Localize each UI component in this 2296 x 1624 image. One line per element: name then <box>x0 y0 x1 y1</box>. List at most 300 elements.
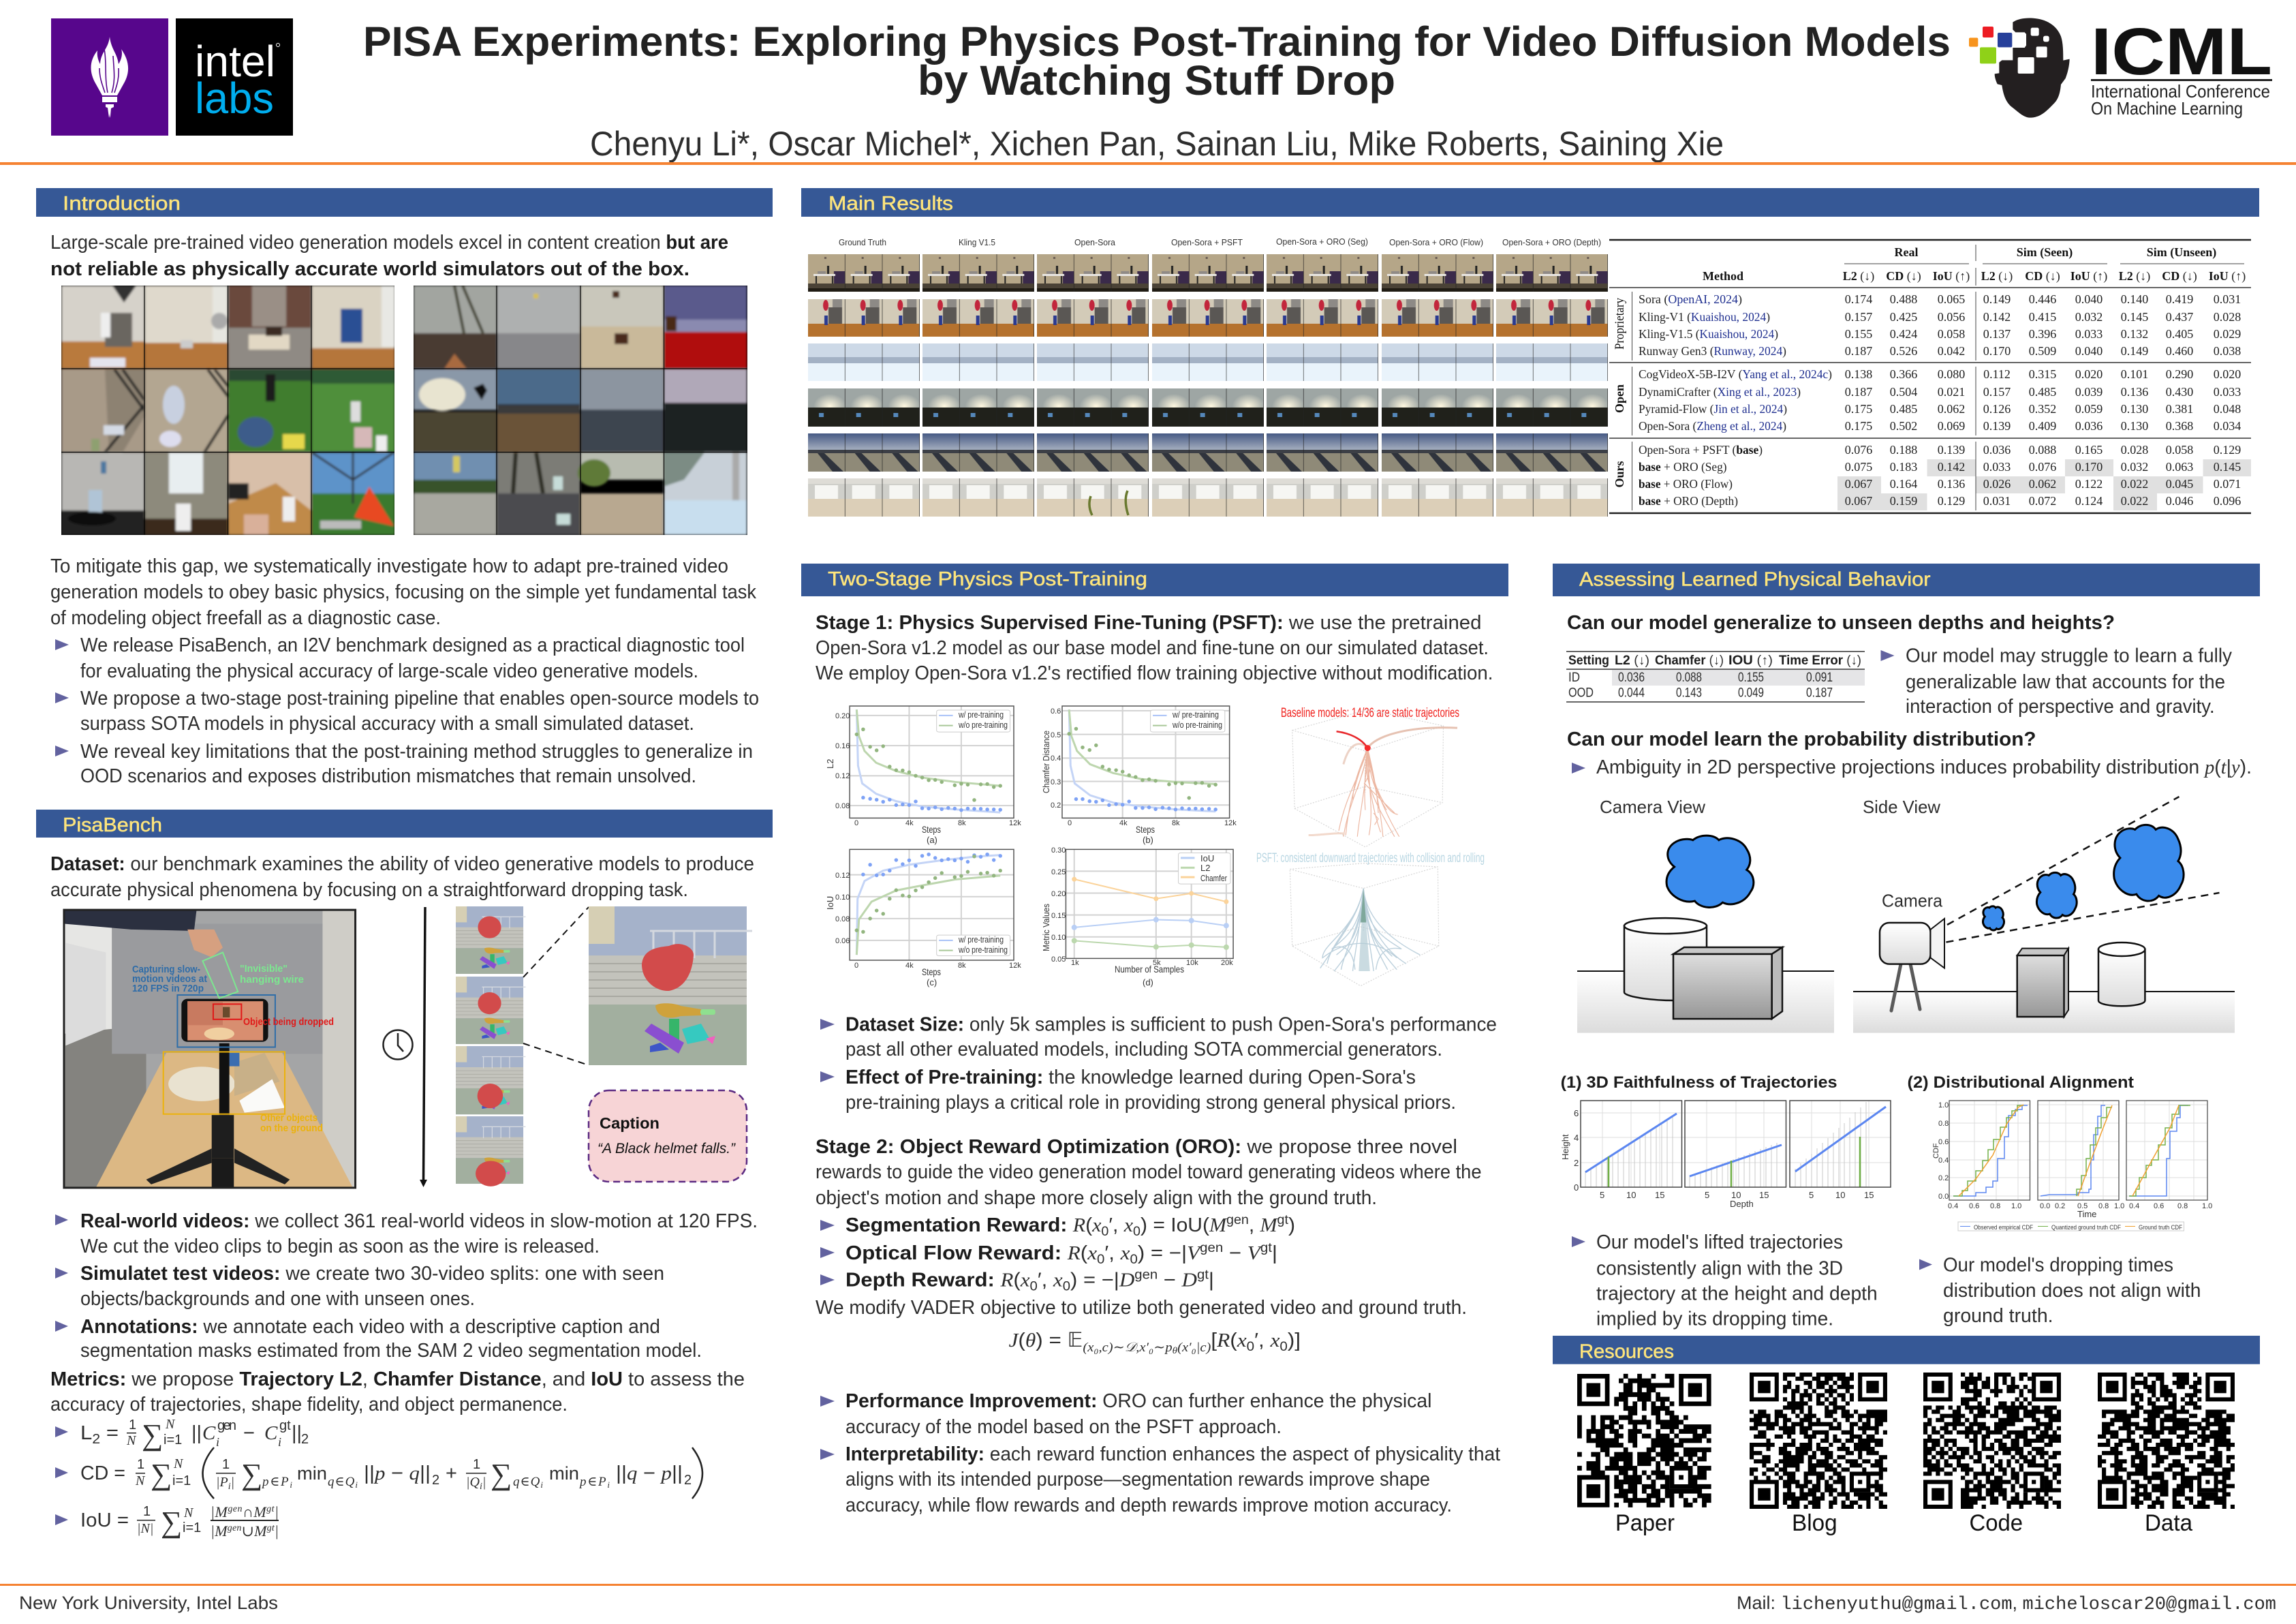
chart: dropping time CDF: Quantized ground truth CDF <box>2051 1224 2121 1231</box>
bullets: reward formulas <box>820 1213 1295 1293</box>
results table: 0.033 <box>2214 385 2241 399</box>
results table: 0.072 <box>2029 494 2056 508</box>
chart: IoU vs steps: w/ pre-training <box>958 934 1004 945</box>
results table: 0.026 <box>1983 477 2011 491</box>
illustration: side view: Camera <box>1882 891 1943 911</box>
bullets: stage 1 findings: Effect of Pre-training: the knowledge learned during Open-Sora's <box>846 1067 1416 1088</box>
formula: objective J: (x₀,c)∼𝒟,x′₀∼p <box>1083 1340 1173 1355</box>
chart: Chamfer vs steps: 0.6 <box>1051 707 1061 716</box>
table: ID vs OOD <box>1566 652 1865 702</box>
chart: metrics vs samples: Metric Values <box>1041 904 1051 951</box>
chart: L2 vs steps: 12k <box>1009 819 1021 827</box>
bullets: reward formulas: gen <box>1226 1213 1249 1227</box>
results table: 0.315 <box>2029 367 2056 381</box>
callout: caption: “A Black helmet falls.” <box>598 1141 736 1156</box>
chart: dropping time CDF: 0.4 <box>1938 1156 1949 1165</box>
results table: 0.130 <box>2121 419 2148 433</box>
formula: Chamfer Distance: i <box>540 1480 543 1490</box>
results table: Kling-V1.5 (Kuaishou, 2024) <box>1639 327 1778 341</box>
results table: 0.137 <box>1983 327 2011 341</box>
figure: PSFT trajectories <box>1256 851 1485 986</box>
bullets: stage 1 findings: past all other evaluated models, including SOTA commercial generators. <box>846 1039 1442 1060</box>
results table: 0.088 <box>2029 443 2056 457</box>
panel: Introduction <box>36 188 773 787</box>
chart: dropping time CDF: CDF <box>1932 1143 1940 1159</box>
QR code: Blog: Blog <box>1792 1510 1837 1536</box>
logo: ICML wordmark: International Conference <box>2091 81 2270 102</box>
formula: IoU: ∩ <box>243 1503 253 1520</box>
formula: objective J: (x′₀|c) <box>1177 1340 1211 1355</box>
chart: L2 vs steps: (a) <box>927 835 937 845</box>
text: stage 2: object's motion and shape more closely align with the ground truth. <box>816 1187 1377 1209</box>
results table: 0.022 <box>2121 494 2148 508</box>
results table: 0.059 <box>2075 402 2103 416</box>
photo: capture setup: motion videos at <box>132 973 207 985</box>
formula: IoU: gen <box>228 1504 242 1514</box>
results table: 0.062 <box>1938 402 1965 416</box>
panel: Resources <box>1553 1336 2260 1536</box>
chart: IoU vs steps: IoU <box>825 896 835 910</box>
bullet: dropping times finding <box>1919 1255 2201 1327</box>
heading: Main Results <box>801 188 2259 217</box>
chart: L2 vs steps: Steps <box>922 824 941 835</box>
results table: 0.075 <box>1845 460 1872 474</box>
bullets: stage 2 findings: accuracy, while flow rewards and depth rewards improve motion accuracy. <box>846 1495 1452 1516</box>
chart: dropping time CDF: 0.4 <box>1948 1202 1958 1210</box>
formula: IoU: gt <box>267 1523 275 1533</box>
chart: metrics vs samples: IoU <box>1200 853 1214 863</box>
formula: Chamfer Distance: i <box>355 1480 358 1490</box>
formula: objective J: θ <box>1173 1346 1177 1356</box>
photo: capture setup: hanging wire <box>240 974 304 985</box>
results table: 0.036 <box>2075 419 2103 433</box>
table: ID vs OOD: 0.044 <box>1618 686 1645 701</box>
logo: ICML wordmark: On Machine Learning <box>2091 98 2243 119</box>
formula: Chamfer Distance: | <box>482 1475 486 1490</box>
chart: dropping time CDF: 0.2 <box>2055 1202 2065 1210</box>
heading: Assessing: Assessing Learned Physical Behavior <box>1579 568 1931 590</box>
chart: metrics vs samples: 0.25 <box>1051 868 1066 876</box>
results table: 0.140 <box>2121 292 2148 306</box>
bullet: dropping times finding: Our model's dropping times <box>1943 1255 2173 1276</box>
results table: 0.046 <box>2166 494 2193 508</box>
formula: objective J: ′, <box>1254 1330 1270 1351</box>
results table: 0.032 <box>2075 310 2103 324</box>
column labels: Open-Sora + ORO (Seg) <box>1276 236 1368 247</box>
chart: metrics vs samples: 10k <box>1186 959 1198 967</box>
formula: objective J: 0 <box>1247 1340 1254 1354</box>
formula: objective J: )] <box>1288 1330 1301 1351</box>
formula: objective J: x <box>1269 1330 1280 1351</box>
formula: L2: C <box>264 1422 278 1444</box>
heading: Main Results: Main Results <box>828 193 953 215</box>
chart: metrics vs samples: L2 <box>1200 863 1210 873</box>
chart: trajectory height vs depth: 6 <box>1574 1108 1579 1118</box>
results table: 0.425 <box>1890 310 1917 324</box>
results table: 0.187 <box>1845 344 1872 358</box>
formula: IoU: |M <box>211 1503 228 1520</box>
chart: trajectory height vs depth: Height <box>1560 1134 1570 1160</box>
chart: dropping time CDF: 1.0 <box>2011 1202 2021 1210</box>
logo: Intel Labs: labs <box>195 74 274 123</box>
results table: 0.460 <box>2166 344 2193 358</box>
bullets: reward formulas: M <box>1259 1214 1278 1236</box>
results table: 0.069 <box>1938 419 1965 433</box>
results table: Open-Sora (Zheng et al., 2024) <box>1639 419 1786 433</box>
logo: Intel Labs <box>176 18 293 136</box>
results table: L2 (↓) <box>2119 269 2150 284</box>
results table: Proprietary <box>1613 298 1627 350</box>
bullets: reward formulas: 0 <box>1097 1253 1104 1267</box>
formula: L2: ∑ <box>142 1418 163 1452</box>
chart: trajectory height vs depth: 10 <box>1626 1190 1636 1200</box>
formula: Chamfer Distance: i <box>607 1480 610 1490</box>
text: mitigation paragraph: To mitigate this gap, we systematically investigate how to adapt pre-trained video <box>50 555 728 577</box>
text: stage 2: rewards to guide the video generation model toward generating videos where the <box>816 1161 1481 1183</box>
results table: 0.430 <box>2166 385 2193 399</box>
bullet: dropping times finding: distribution does not align with <box>1943 1280 2201 1302</box>
bullets: stage 2 findings: Interpretability: each reward function enhances the aspect of physicality that <box>846 1443 1500 1465</box>
results table: 0.164 <box>1890 477 1917 491</box>
results table: 0.029 <box>2214 327 2241 341</box>
chart: trajectory height vs depth: 2 <box>1574 1158 1579 1168</box>
chart: dropping time CDF: 1.0 <box>1938 1101 1949 1109</box>
dashed zoom lines <box>523 907 589 1065</box>
results table: 0.409 <box>2029 419 2056 433</box>
chart: Chamfer vs steps: (b) <box>1143 835 1153 845</box>
chart: Chamfer vs steps: 0.5 <box>1051 731 1061 739</box>
QR code: Code <box>1925 1373 2059 1536</box>
formula: Chamfer Distance: i <box>480 1482 482 1492</box>
chart: trajectory height vs depth: 5 <box>1809 1190 1814 1200</box>
results table: 0.126 <box>1983 402 2011 416</box>
results table: 0.415 <box>2029 310 2056 324</box>
QR code: Paper: Paper <box>1615 1510 1675 1536</box>
formula: L2: L <box>80 1422 91 1444</box>
formula: L2: = <box>100 1422 119 1444</box>
results table: 0.124 <box>2075 494 2103 508</box>
bullets: stage 2 findings: accuracy of the model based on the PSFT approach. <box>846 1416 1282 1438</box>
bullets: reward formulas: ′, <box>1108 1214 1124 1236</box>
results table: DynamiCrafter (Xing et al., 2023) <box>1639 385 1801 399</box>
results table: 0.183 <box>1890 460 1917 474</box>
formula: Chamfer Distance: |P <box>216 1475 228 1490</box>
results table: base + ORO (Seg) <box>1639 460 1726 474</box>
results table: Real <box>1894 245 1919 259</box>
image grid: real-world drops <box>61 286 395 535</box>
results table: Sora (OpenAI, 2024) <box>1639 292 1742 307</box>
formula: Chamfer Distance <box>55 1447 702 1499</box>
chart: L2 vs steps: w/o pre-training <box>958 720 1008 730</box>
text: mitigation paragraph <box>50 555 756 629</box>
header: logos, title and authors <box>0 14 2296 165</box>
text: stage 1 <box>816 612 1493 684</box>
formula: L2: 2 <box>92 1432 100 1447</box>
results table: CD (↓) <box>1886 269 1921 284</box>
chart: dropping time CDF: 0.0 <box>1938 1193 1949 1201</box>
bullets: dataset details: objects/backgrounds and one with unseen ones. <box>80 1288 475 1310</box>
footer <box>0 1584 2296 1615</box>
formula: Chamfer Distance: CD = <box>80 1462 125 1484</box>
formula: Chamfer Distance: i=1 <box>172 1473 191 1488</box>
chart: Chamfer vs steps: w/o pre-training <box>1172 720 1222 730</box>
bullets: reward formulas: 0 <box>1133 1225 1141 1239</box>
results table: 0.136 <box>2121 385 2148 399</box>
bullets: reward formulas: x <box>1123 1214 1133 1236</box>
bullets: stage 1 findings <box>820 1014 1497 1114</box>
formula: Chamfer Distance: ∑ <box>241 1458 262 1491</box>
formula: Chamfer Distance: ||q − p|| <box>616 1462 683 1484</box>
bullet: generalization finding: interaction of perspective and gravity. <box>1906 696 2215 718</box>
photo: capture setup: "Invisible" <box>240 963 288 975</box>
chart: metrics vs samples: (d) <box>1143 977 1153 987</box>
results table: 0.396 <box>2029 327 2056 341</box>
chart: IoU vs steps: (c) <box>927 977 937 987</box>
bullet: lifted trajectories finding: implied by its dropping time. <box>1596 1308 1833 1330</box>
chart: Chamfer vs steps: w/ pre-training <box>1172 709 1219 720</box>
chart: IoU vs steps: 0 <box>854 962 858 970</box>
text: intro lead <box>50 232 728 280</box>
bullets: reward formulas: ′, <box>1038 1269 1053 1291</box>
results table: 0.175 <box>1845 419 1872 433</box>
bullets: reward formulas: V <box>1187 1242 1203 1264</box>
QR code: Code: Code <box>1969 1510 2023 1536</box>
bullets: reward formulas: M <box>1209 1214 1228 1236</box>
results table: 0.122 <box>2075 477 2103 491</box>
logo: NYU torch <box>51 18 168 136</box>
bullets: reward formulas: V <box>1247 1242 1262 1264</box>
formula: Chamfer Distance: + <box>446 1462 457 1484</box>
heading: PisaBench <box>36 810 773 838</box>
results table: 0.065 <box>1938 292 1965 306</box>
results table: 0.145 <box>2214 460 2241 474</box>
bullets: reward formulas: 0 <box>1063 1280 1070 1293</box>
illustration: side view: Side View <box>1863 797 1940 817</box>
results table: 0.028 <box>2214 310 2241 324</box>
column labels: Open-Sora <box>1074 237 1116 247</box>
text: metrics: Metrics: we propose Trajectory L2, Chamfer Distance, and IoU to assess the <box>50 1368 745 1390</box>
results table: 0.188 <box>1890 443 1917 457</box>
photo: capture setup <box>64 910 356 1188</box>
formula: Chamfer Distance: 1 <box>473 1457 480 1472</box>
results table: base + ORO (Flow) <box>1639 477 1733 491</box>
results table: 0.526 <box>1890 344 1917 358</box>
chart: L2 vs steps: 0.08 <box>835 802 850 810</box>
chart: IoU vs steps: 0.08 <box>835 915 850 923</box>
figure: baseline trajectories: Baseline models: 14/36 are static trajectories <box>1281 706 1459 720</box>
chart: trajectory height vs depth: 15 <box>1864 1190 1874 1200</box>
QR code: Paper <box>1577 1376 1711 1536</box>
formula: Chamfer Distance: 2 <box>432 1473 439 1488</box>
formula: IoU: 1 <box>143 1504 151 1519</box>
table: ID vs OOD: 0.143 <box>1676 686 1702 701</box>
text: stage 1: Stage 1: Physics Supervised Fine-Tuning (PSFT): we use the pretrained <box>816 612 1481 634</box>
bullets: dataset details: Real-world videos: we collect 361 real-world videos in slow-motion at 120 FPS. <box>80 1210 758 1232</box>
image grid: simulated drops <box>414 286 747 535</box>
results table: 0.067 <box>1845 494 1872 508</box>
heading: Assessing <box>1553 564 2260 596</box>
chart: trajectory height vs depth: 5 <box>1705 1190 1709 1200</box>
chart: trajectory height vs depth: 10 <box>1731 1190 1741 1200</box>
results table: 0.040 <box>2075 292 2103 306</box>
results table: 0.039 <box>2075 385 2103 399</box>
results table: 0.170 <box>2075 460 2103 474</box>
bullets: reward formulas: − <box>1223 1242 1247 1264</box>
logo: ICML head <box>1969 18 2070 118</box>
results table: Ours <box>1613 461 1626 488</box>
table: ID vs OOD: 0.088 <box>1676 671 1702 685</box>
column labels <box>839 236 1601 247</box>
bullets: contributions: OOD scenarios and exposes distribution mismatches that remain unsolved. <box>80 765 696 787</box>
results table: 0.446 <box>2029 292 2056 306</box>
table: ID vs OOD: 0.091 <box>1806 671 1833 685</box>
panel: Two-Stage Physics Post-Training <box>801 564 1508 1516</box>
footer: contact emails: Mail: lichenyuthu@gmail.com, micheloscar20@gmail.com <box>1737 1593 2276 1615</box>
chart: metrics vs samples: 5k <box>1153 959 1161 967</box>
formula: IoU: IoU = <box>80 1510 129 1531</box>
results table: 0.437 <box>2166 310 2193 324</box>
text: stage 2: Stage 2: Object Reward Optimization (ORO): we propose three novel <box>816 1136 1457 1158</box>
formula: L2 <box>55 1417 309 1452</box>
chart: dropping time CDF: 0.8 <box>2177 1202 2188 1210</box>
bullets: reward formulas: ) <box>1288 1214 1295 1236</box>
text: dataset description: accurate physical phenomena by focusing on a straightforward dropping task. <box>50 879 688 901</box>
heading: Introduction <box>36 188 773 217</box>
photo: capture setup: Capturing slow- <box>132 964 200 975</box>
chart: Chamfer vs steps <box>1041 706 1237 845</box>
chart: Chamfer vs steps: Steps <box>1136 824 1155 835</box>
text: metrics <box>50 1368 745 1415</box>
chart: dropping time CDF: 0.8 <box>1990 1202 2000 1210</box>
heading: 3D faithfulness: (1) 3D Faithfulness of Trajectories <box>1561 1073 1837 1092</box>
results table: 0.034 <box>2214 419 2241 433</box>
formula: Chamfer Distance: i <box>290 1480 292 1490</box>
icon: clock <box>383 1030 413 1059</box>
results table: 0.149 <box>1983 292 2011 306</box>
chart: Chamfer vs steps: 0.4 <box>1051 754 1061 763</box>
results table: IoU (↑) <box>2209 269 2246 284</box>
results table: 0.157 <box>1845 310 1872 324</box>
column labels: Kling V1.5 <box>959 237 995 247</box>
chart: Chamfer vs steps: 12k <box>1224 819 1237 827</box>
results table: 0.040 <box>2075 344 2103 358</box>
formula: Chamfer Distance: q∈Q <box>328 1475 354 1489</box>
formula: Chamfer Distance: min <box>297 1463 327 1484</box>
results table: Open <box>1613 384 1626 413</box>
formula: L2: − <box>243 1422 255 1444</box>
formula: objective J: [ <box>1211 1330 1217 1351</box>
bullets: reward formulas: , <box>1249 1214 1260 1236</box>
chart: trajectory height vs depth: 0 <box>1574 1182 1579 1193</box>
results table: 0.036 <box>1983 443 2011 457</box>
bullets: reward formulas: x <box>1120 1242 1130 1264</box>
chart: IoU vs steps: 12k <box>1009 962 1021 970</box>
formula: IoU: | <box>275 1522 279 1539</box>
formula: Chamfer Distance: 1 <box>137 1457 144 1472</box>
chart: trajectory height vs depth: Depth <box>1730 1199 1754 1209</box>
heading: Resources: Resources <box>1579 1341 1674 1363</box>
column labels: Open-Sora + ORO (Depth) <box>1502 237 1601 247</box>
photo: capture setup: Other objects <box>260 1112 317 1124</box>
chart: Chamfer vs steps: 0.3 <box>1051 778 1061 786</box>
results table: 0.101 <box>2121 367 2148 381</box>
results table: 0.058 <box>1938 327 1965 341</box>
illustration: side view <box>1853 797 2235 1033</box>
formula: Chamfer Distance: i <box>228 1482 231 1492</box>
column labels: Open-Sora + PSFT <box>1171 237 1243 247</box>
heading: Resources <box>1553 1336 2260 1364</box>
bullets: reward formulas: ) = IoU( <box>1141 1214 1209 1236</box>
chart: IoU vs steps: 0.10 <box>835 893 850 902</box>
chart: L2 vs steps: 0 <box>854 819 858 827</box>
results table: 0.132 <box>2121 327 2148 341</box>
results table: 0.045 <box>2166 477 2193 491</box>
results table: 0.504 <box>1890 385 1917 399</box>
results table: 0.112 <box>1983 367 2011 381</box>
formula: L2: || <box>191 1422 202 1444</box>
bullet: lifted trajectories finding: Our model's lifted trajectories <box>1596 1231 1843 1253</box>
bullet: ambiguity: Ambiguity in 2D perspective projections induces probability distribution p(t|y). <box>1596 756 2252 778</box>
bullets: reward formulas: Depth Reward: R(x <box>846 1269 1029 1291</box>
table: ID vs OOD: ID <box>1568 671 1580 685</box>
results table: IoU (↑) <box>1933 269 1970 284</box>
table: ID vs OOD: Setting <box>1568 654 1609 668</box>
text: VADER objective: We modify VADER objective to utilize both generated video and ground truth. <box>816 1297 1467 1319</box>
QR code: Data: Data <box>2145 1510 2192 1536</box>
bullets: stage 2 findings: aligns with its intended purpose—segmentation rewards improve shape <box>846 1469 1430 1490</box>
chart: trajectory height vs depth: 4 <box>1574 1133 1579 1143</box>
formula: L2: i <box>216 1435 219 1449</box>
results table: 0.174 <box>1845 292 1872 306</box>
results table: CD (↓) <box>2025 269 2060 284</box>
chart: dropping time CDF: 0.8 <box>2098 1202 2109 1210</box>
formula: IoU: ∪ <box>242 1522 254 1539</box>
results table: L2 (↓) <box>1981 269 2013 284</box>
results table: 0.290 <box>2166 367 2193 381</box>
results table: 0.063 <box>2166 460 2193 474</box>
formula: Chamfer Distance: p∈P <box>580 1475 606 1489</box>
logo: ICML wordmark <box>2091 14 2272 119</box>
chart: L2 vs steps: 0.12 <box>835 772 850 780</box>
table: ID vs OOD: IOU (↑) <box>1728 654 1773 668</box>
results table: 0.067 <box>1845 477 1872 491</box>
bullet: lifted trajectories finding: consistently align with the 3D <box>1596 1258 1843 1280</box>
subheading: probability: Can our model learn the probability distribution? <box>1567 729 2036 750</box>
bullets: reward formulas: x <box>1053 1269 1063 1291</box>
bullets: reward formulas: | <box>1209 1269 1214 1291</box>
formula: IoU: M <box>254 1522 266 1539</box>
chart: Chamfer vs steps: Chamfer Distance <box>1041 731 1051 793</box>
text: mitigation paragraph: generation models to obey basic physics, focusing on the simple yet fundamental task <box>50 581 756 603</box>
results table: 0.142 <box>1983 310 2011 324</box>
results table: 0.129 <box>2214 443 2241 457</box>
formula: IoU: ∑ <box>161 1505 182 1539</box>
results table: 0.038 <box>2214 344 2241 358</box>
image: enlarged segmentation <box>589 906 752 1065</box>
results table: 0.165 <box>2075 443 2103 457</box>
results table: 0.062 <box>2029 477 2056 491</box>
chart: dropping time CDF: Ground truth CDF <box>2139 1224 2182 1231</box>
QR code: Blog <box>1750 1375 1887 1536</box>
results table: 0.485 <box>1890 402 1917 416</box>
chart: IoU vs steps: 4k <box>905 962 914 970</box>
table: ID vs OOD: 0.049 <box>1738 686 1764 701</box>
results table: 0.129 <box>1938 494 1965 508</box>
bullet: lifted trajectories finding: trajectory at the height and depth <box>1596 1283 1878 1304</box>
results table: 0.020 <box>2075 367 2103 381</box>
callout: caption: Caption <box>600 1114 660 1132</box>
results table: 0.031 <box>2214 292 2241 306</box>
